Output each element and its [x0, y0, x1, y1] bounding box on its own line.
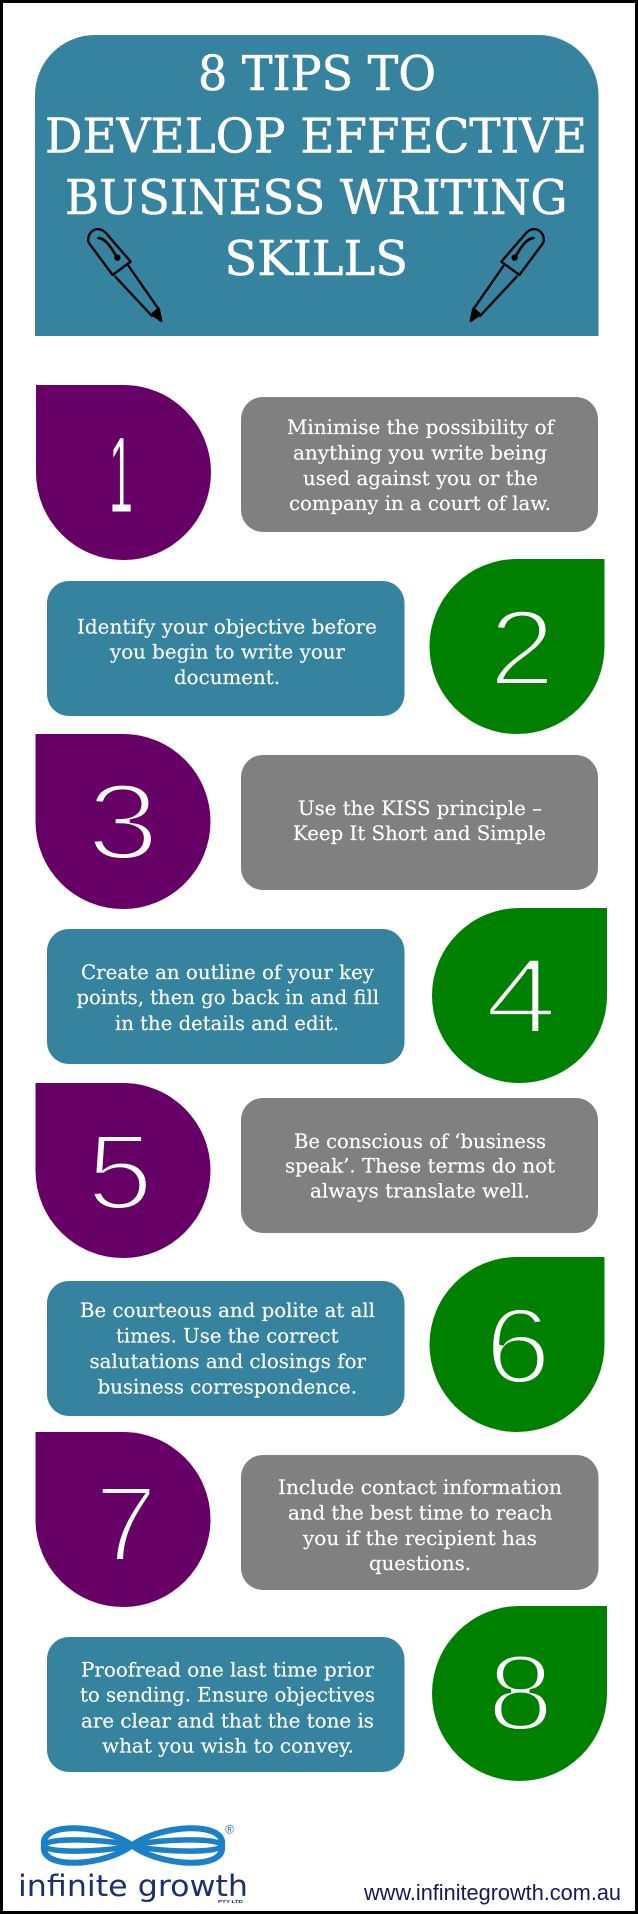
title: DEVELOP EFFECTIVE [45, 108, 587, 164]
badge: number 4 [432, 908, 607, 1083]
text card: tip 2: you begin to write your [109, 641, 346, 664]
badge: number 7 [36, 1432, 210, 1607]
icon: left pen [88, 229, 161, 321]
badge: number 2 [429, 559, 604, 734]
panel: tip 1 [36, 385, 598, 560]
logo: infinite growth [18, 1822, 248, 1904]
text card: tip 5: Be conscious of ‘business [294, 1130, 546, 1153]
text card: tip 8: what you wish to convey. [102, 1734, 354, 1757]
text card: tip 3: Use the KISS principle – [298, 797, 542, 820]
text card: tip 7: Include contact information [278, 1476, 562, 1499]
panel: tip 8 [47, 1606, 607, 1781]
title: SKILLS [224, 231, 408, 287]
text card: tip 6 [47, 1281, 404, 1416]
text card: tip 6: salutations and closings for [90, 1350, 367, 1373]
badge: number 3 [36, 734, 210, 909]
text card: tip 3 [241, 755, 598, 890]
text card: tip 2: Identify your objective before [77, 615, 377, 638]
title: 8 TIPS TO [198, 46, 436, 102]
badge: number 8 [432, 1606, 607, 1781]
text card: tip 7: questions. [369, 1552, 471, 1575]
text card: tip 3: Keep It Short and Simple [293, 822, 546, 845]
badge: number 5 [36, 1083, 210, 1258]
badge: number 7: 7 [95, 1463, 157, 1584]
text card: tip 2: document. [174, 666, 280, 689]
panel: tip 2 [47, 559, 604, 734]
panel: header [35, 35, 598, 336]
text card: tip 6: Be courteous and polite at all [80, 1299, 375, 1322]
text card: tip 4 [47, 929, 404, 1064]
logo suffix: PTY LTD [218, 1899, 244, 1904]
badge: number 1: 1 [109, 414, 133, 535]
logo trademark: ® [225, 1822, 234, 1836]
badge: number 4: 4 [485, 935, 557, 1056]
text card: tip 1 [241, 397, 598, 532]
badge: number 1 [36, 385, 211, 560]
text card: tip 5: always translate well. [310, 1180, 530, 1203]
panel: tip 3 [36, 734, 598, 909]
badge: number 5: 5 [87, 1111, 153, 1232]
text card: tip 8: are clear and that the tone is [81, 1709, 374, 1732]
text card: tip 4: Create an outline of your key [81, 961, 374, 984]
text card: tip 8: to sending. Ensure objectives [80, 1684, 375, 1707]
logo wordmark: infinite growth [18, 1869, 248, 1903]
title [45, 46, 587, 287]
icon: infinity ribbon [44, 1828, 222, 1863]
badge: number 2: 2 [489, 587, 555, 708]
text card: tip 2 [47, 581, 404, 716]
panel: tip 5 [36, 1083, 598, 1258]
text card: tip 6: times. Use the correct [116, 1324, 339, 1347]
text card: tip 1: company in a court of law. [289, 492, 551, 515]
text card: tip 4: points, then go back in and fill [76, 986, 379, 1009]
text card: tip 1: used against you or the [303, 467, 538, 490]
badge: number 6 [430, 1257, 604, 1432]
text card: tip 5: speak’. These terms do not [285, 1155, 555, 1178]
text card: tip 6: business correspondence. [98, 1375, 357, 1398]
icon: right pen [471, 229, 544, 321]
text card: tip 8 [47, 1637, 404, 1772]
badge: number 6: 6 [485, 1285, 551, 1406]
badge: number 3: 3 [87, 761, 159, 882]
text card: tip 7 [241, 1455, 598, 1590]
text card: tip 8: Proofread one last time prior [81, 1658, 375, 1681]
text card: tip 1: anything you write being [293, 441, 547, 464]
title: BUSINESS WRITING [65, 170, 568, 226]
panel: tip 6 [47, 1257, 604, 1432]
website url: www.infinitegrowth.com.au [363, 1880, 621, 1905]
text card: tip 5 [241, 1098, 598, 1233]
panel: tip 4 [47, 908, 607, 1083]
text card: tip 1: Minimise the possibility of [287, 416, 556, 439]
badge: number 8: 8 [488, 1632, 554, 1753]
panel: tip 7 [36, 1432, 598, 1607]
text card: tip 4: in the details and edit. [115, 1012, 339, 1035]
text card: tip 7: you if the recipient has [302, 1527, 537, 1550]
text card: tip 7: and the best time to reach [288, 1501, 553, 1524]
